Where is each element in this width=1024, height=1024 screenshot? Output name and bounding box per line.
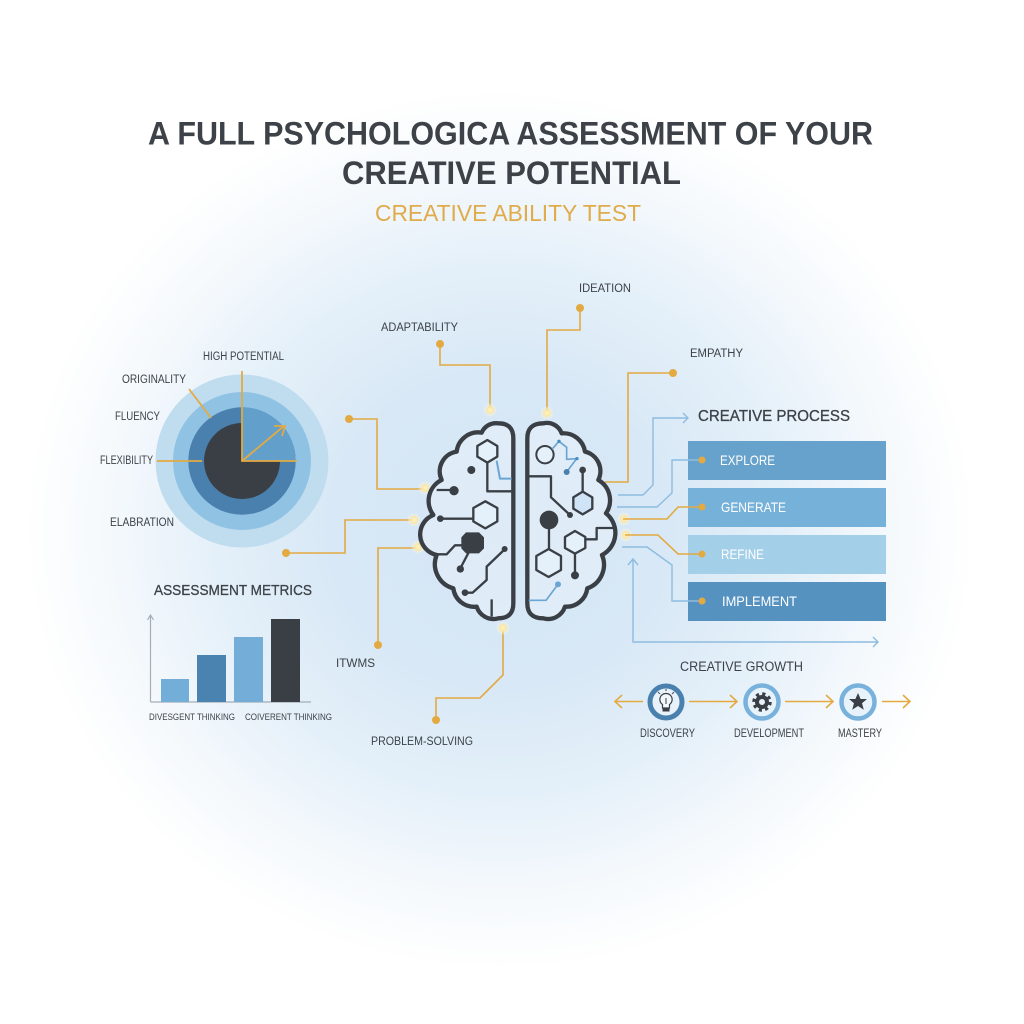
step labels: DEVELOPMENT	[734, 728, 804, 740]
left hemisphere	[420, 423, 513, 619]
title: CREATIVE POTENTIAL	[342, 155, 681, 191]
connector labels	[336, 283, 743, 748]
subtitle: CREATIVE ABILITY TEST	[375, 200, 641, 226]
radial target chart	[156, 371, 328, 548]
icon: development gear	[746, 686, 778, 718]
growth timeline	[615, 686, 910, 740]
step: implement: IMPLEMENT	[722, 593, 797, 609]
step labels: DISCOVERY	[640, 728, 695, 740]
heading: assessment metrics: ASSESSMENT METRICS	[154, 582, 312, 599]
title: A FULL PSYCHOLOGICA ASSESSMENT OF YOUR	[148, 116, 873, 152]
right hemisphere	[527, 423, 616, 619]
heading: creative process: CREATIVE PROCESS	[698, 408, 850, 425]
connector labels: PROBLEM-SOLVING	[371, 736, 473, 748]
step: generate: GENERATE	[721, 499, 786, 515]
step: implement	[688, 582, 886, 621]
title	[148, 116, 873, 191]
connector labels: IDEATION	[579, 283, 631, 295]
connector labels: EMPATHY	[690, 348, 743, 360]
step: generate	[688, 488, 886, 527]
process connectors	[617, 413, 878, 647]
bar chart: COIVERENT THINKING	[245, 712, 332, 723]
chart labels: FLUENCY	[115, 411, 160, 423]
panel: creative process steps	[688, 441, 886, 621]
step labels	[640, 728, 882, 740]
connectors to brain	[282, 304, 677, 724]
chart labels: ELABRATION	[110, 517, 174, 529]
heading: creative growth: CREATIVE GROWTH	[680, 659, 803, 674]
arrows	[615, 695, 910, 708]
step: refine	[688, 535, 886, 574]
bar chart	[148, 615, 332, 723]
icon: mastery star	[842, 686, 874, 718]
step: explore: EXPLORE	[720, 452, 775, 468]
step labels: MASTERY	[838, 728, 882, 740]
step: refine: REFINE	[721, 546, 764, 562]
chart labels: ORIGINALITY	[122, 374, 186, 386]
chart labels	[100, 351, 284, 529]
connector labels: ADAPTABILITY	[381, 322, 458, 334]
icon: circuit brain	[420, 423, 616, 619]
bar chart: DIVESGENT THINKING	[149, 712, 235, 723]
icon: discovery bulb	[650, 686, 682, 718]
chart labels: FLEXIBILITY	[100, 455, 153, 467]
connector labels: ITWMS	[336, 658, 375, 670]
chart labels: HIGH POTENTIAL	[203, 351, 284, 363]
step: explore	[688, 441, 886, 480]
